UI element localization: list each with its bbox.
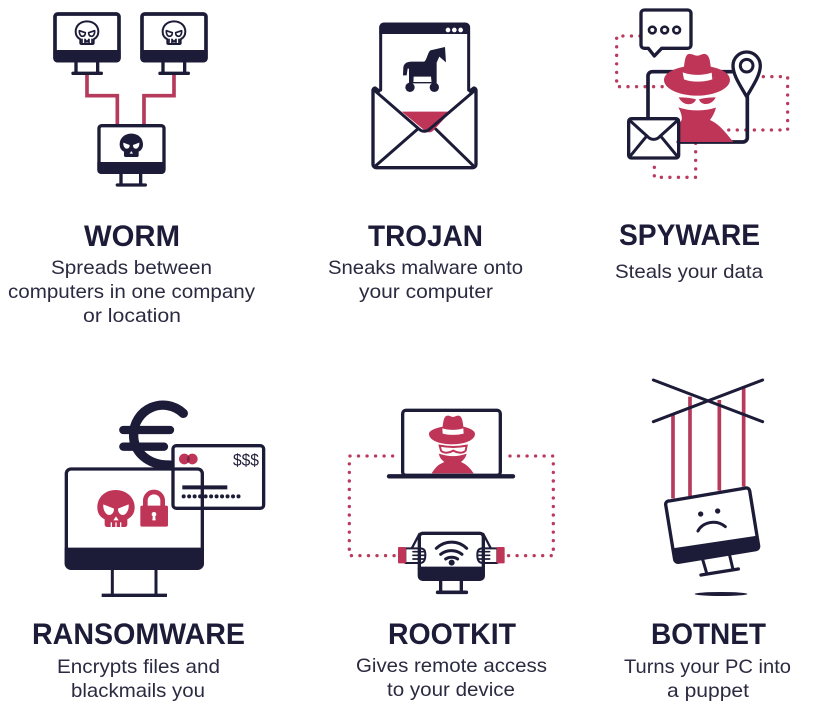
text: spyware description: Steals your data bbox=[615, 261, 763, 283]
heading: spyware: SPYWARE bbox=[619, 219, 760, 252]
text: ransomware description bbox=[57, 656, 220, 702]
icon: locked monitor with euro and card bbox=[65, 405, 264, 597]
text: worm description bbox=[8, 257, 255, 327]
panel: spyware bbox=[615, 10, 788, 283]
text: botnet description: a puppet bbox=[667, 680, 750, 702]
text: trojan description: your computer bbox=[359, 281, 494, 303]
spy figure bbox=[664, 54, 733, 142]
sad face bbox=[698, 508, 725, 531]
monitor frame bbox=[648, 72, 747, 142]
icon: trojan horse in envelope bbox=[373, 23, 476, 168]
hacker figure bbox=[429, 416, 475, 473]
text: ransomware description: blackmails you bbox=[71, 680, 205, 702]
location pin bbox=[733, 52, 760, 97]
panel: worm bbox=[8, 14, 255, 327]
dotted data lines bbox=[617, 36, 788, 177]
text: botnet description bbox=[624, 656, 791, 702]
connecting cables bbox=[87, 74, 174, 125]
heading: worm: WORM bbox=[84, 220, 180, 253]
text: rootkit description bbox=[356, 655, 547, 701]
horse bbox=[403, 47, 446, 92]
euro symbol bbox=[123, 405, 183, 465]
credit card: $$$ bbox=[233, 452, 259, 470]
panel: ransomware bbox=[32, 405, 264, 702]
monitor bbox=[65, 469, 204, 597]
monitor with wifi bbox=[418, 533, 485, 592]
puppet strings bbox=[673, 387, 744, 498]
laptop bbox=[389, 410, 513, 476]
credit card bbox=[173, 446, 264, 508]
icon: remote hacker controlling monitor bbox=[349, 410, 553, 592]
text: trojan description bbox=[328, 257, 523, 303]
panel: botnet bbox=[624, 380, 791, 702]
heading: ransomware: RANSOMWARE bbox=[32, 618, 245, 651]
puppet control bars bbox=[653, 380, 763, 422]
text: worm description: or location bbox=[83, 305, 181, 327]
left hand bbox=[398, 534, 425, 563]
dotted connection lines bbox=[349, 456, 553, 556]
envelope bbox=[629, 119, 679, 158]
text: trojan description: Sneaks malware onto bbox=[328, 257, 523, 279]
text: ransomware description: Encrypts files and bbox=[57, 656, 220, 678]
text: rootkit description: to your device bbox=[387, 679, 515, 701]
panel: rootkit bbox=[349, 410, 553, 701]
icon: puppet monitor on strings bbox=[653, 380, 763, 596]
right hand bbox=[477, 534, 505, 563]
icon: spy with bubble, pin and envelope bbox=[617, 10, 788, 177]
speech bubble bbox=[641, 10, 691, 56]
text: worm description: Spreads between bbox=[51, 257, 212, 279]
panel: trojan bbox=[328, 23, 523, 303]
tilted monitor bbox=[666, 488, 760, 575]
padlock bbox=[140, 492, 168, 527]
text: worm description: computers in one company bbox=[8, 281, 255, 303]
floor shadow bbox=[695, 592, 747, 596]
monitor: bottom infected bbox=[97, 126, 165, 185]
heading: botnet: BOTNET bbox=[651, 618, 766, 651]
heading: rootkit: ROOTKIT bbox=[388, 618, 516, 651]
heading: trojan: TROJAN bbox=[368, 220, 483, 253]
envelope bbox=[373, 88, 476, 168]
skull bbox=[97, 490, 135, 527]
text: rootkit description: Gives remote access bbox=[356, 655, 547, 677]
monitor: top left bbox=[53, 14, 121, 73]
monitor: top right bbox=[140, 14, 208, 73]
wifi symbol bbox=[436, 542, 467, 566]
document window bbox=[379, 23, 470, 90]
icon: worm network of monitors bbox=[53, 14, 208, 185]
text: botnet description: Turns your PC into bbox=[624, 656, 791, 678]
